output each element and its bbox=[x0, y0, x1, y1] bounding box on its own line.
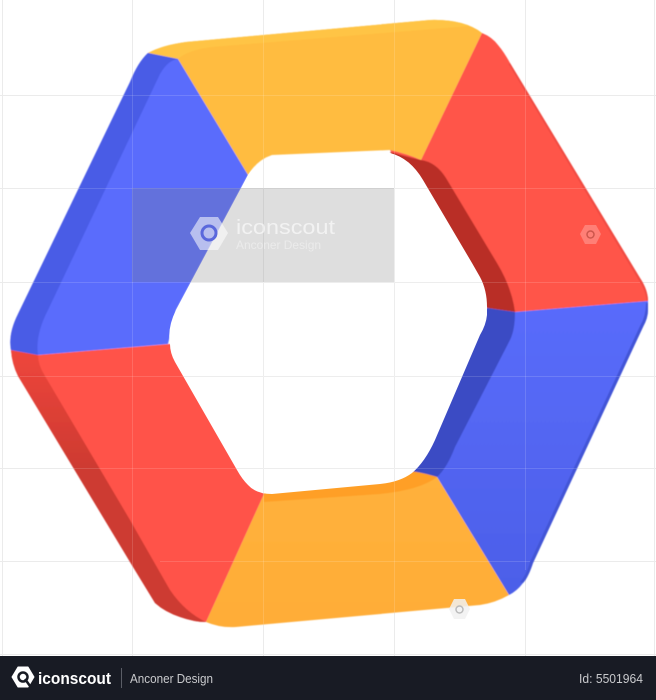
outer wall: darker blue bbox=[10, 53, 178, 355]
footer separator bbox=[121, 668, 122, 688]
segment: red upper right bbox=[390, 33, 648, 312]
footer bar bbox=[0, 656, 656, 700]
footer asset id: Id: 5501964 bbox=[579, 671, 643, 686]
segment: red lower left bbox=[11, 344, 264, 622]
segment: yellow bottom bbox=[206, 470, 509, 627]
footer brand name: iconscout bbox=[38, 669, 111, 688]
segment: yellow top bbox=[148, 20, 482, 175]
watermark panel bbox=[132, 188, 394, 282]
watermark author name: Anconer Design bbox=[236, 238, 321, 252]
segment: blue left bbox=[10, 53, 248, 355]
inner wall: orange bbox=[264, 470, 437, 502]
segment: blue lower right bbox=[405, 301, 648, 595]
inner wall: dark blue bbox=[405, 308, 515, 477]
icon: iconscout logo bbox=[12, 667, 34, 687]
icon: small watermark bottom bbox=[449, 599, 470, 619]
icon: small watermark right bbox=[580, 225, 601, 244]
watermark brand name: iconscout bbox=[236, 217, 336, 239]
footer author name: Anconer Design bbox=[130, 671, 213, 686]
watermark: logo and text bbox=[190, 217, 336, 252]
icon: watermark hexagon bbox=[190, 217, 228, 250]
inner wall: dark red bbox=[390, 152, 515, 312]
outer wall: dark red bbox=[11, 350, 206, 622]
